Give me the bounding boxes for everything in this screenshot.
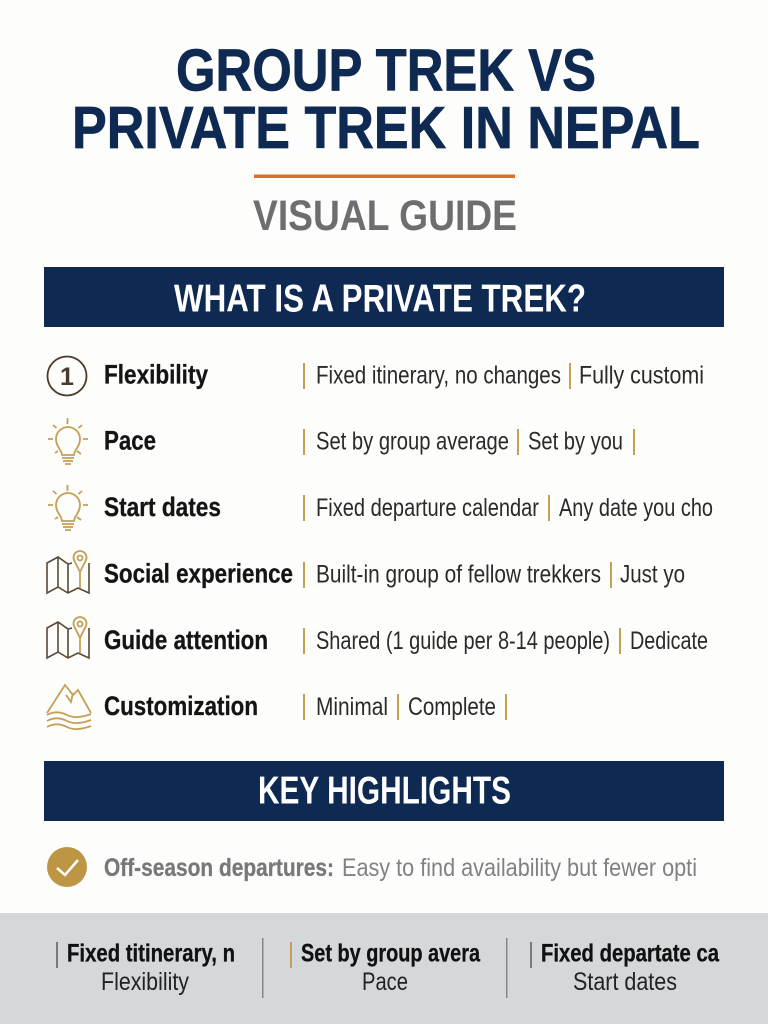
row: flexibility: Flexibility — [104, 360, 208, 390]
highlight item: Easy to find availability but fewer opti — [342, 854, 697, 882]
icon: light bulb — [48, 418, 88, 464]
footer item: start dates — [530, 940, 720, 996]
row: social experience — [47, 551, 685, 593]
section banner: what is a private trek — [44, 267, 724, 327]
title underline — [254, 174, 515, 178]
icon: check badge — [47, 847, 87, 887]
row: pace: Set by you — [528, 428, 623, 456]
footer item: flexibility — [56, 940, 235, 996]
row: start dates: Start dates — [104, 492, 221, 522]
title: GROUP TREK VS — [176, 38, 596, 104]
section banner: key highlights: KEY HIGHLIGHTS — [258, 770, 511, 812]
row: start dates — [48, 485, 713, 530]
row: flexibility: Fully customi — [579, 362, 704, 390]
row: pace: Set by group average — [316, 428, 509, 456]
title: PRIVATE TREK IN NEPAL — [72, 95, 700, 161]
footer item: flexibility: Flexibility — [101, 968, 189, 996]
highlight item: Off-season departures: — [104, 854, 334, 882]
subtitle: VISUAL GUIDE — [253, 192, 517, 240]
icon: map with pin — [47, 617, 89, 658]
row: pace: Pace — [104, 426, 156, 456]
icon: light bulb — [48, 485, 88, 530]
highlight item — [47, 847, 697, 887]
footer item: start dates: Start dates — [573, 968, 677, 996]
row: customization: Complete — [408, 693, 496, 721]
icon: mountains and waves — [47, 685, 91, 729]
icon: numbered circle: 1 — [60, 363, 74, 391]
footer item: start dates: Fixed departate ca — [541, 940, 720, 968]
row: social experience: Just yo — [620, 560, 685, 588]
row: flexibility: Fixed itinerary, no changes — [316, 362, 561, 390]
row: customization: Minimal — [316, 693, 388, 721]
row: flexibility — [48, 356, 704, 396]
row: guide attention — [47, 617, 708, 658]
row: guide attention: Dedicate — [630, 627, 708, 655]
footer item: flexibility: Fixed titinerary, n — [67, 940, 235, 968]
row: customization — [47, 685, 507, 729]
section banner: what is a private trek: WHAT IS A PRIVATE TREK? — [174, 278, 586, 320]
title — [72, 38, 700, 161]
row: start dates: Any date you cho — [559, 494, 713, 522]
row: guide attention: Guide attention — [104, 625, 268, 655]
footer item: pace: Set by group avera — [301, 940, 481, 968]
row: social experience: Social experience — [104, 558, 293, 588]
footer item: pace: Pace — [362, 968, 408, 996]
row: guide attention: Shared (1 guide per 8-14 people) — [316, 627, 610, 655]
row: pace — [48, 418, 635, 464]
comparison table — [47, 356, 713, 729]
summary footer — [0, 913, 768, 1024]
icon: numbered circle — [48, 356, 86, 396]
row: start dates: Fixed departure calendar — [316, 494, 539, 522]
footer item: pace — [290, 940, 481, 996]
row: social experience: Built-in group of fellow trekkers — [316, 560, 601, 588]
section banner: key highlights — [44, 761, 724, 821]
row: customization: Customization — [104, 691, 258, 721]
icon: map with pin — [47, 551, 89, 593]
